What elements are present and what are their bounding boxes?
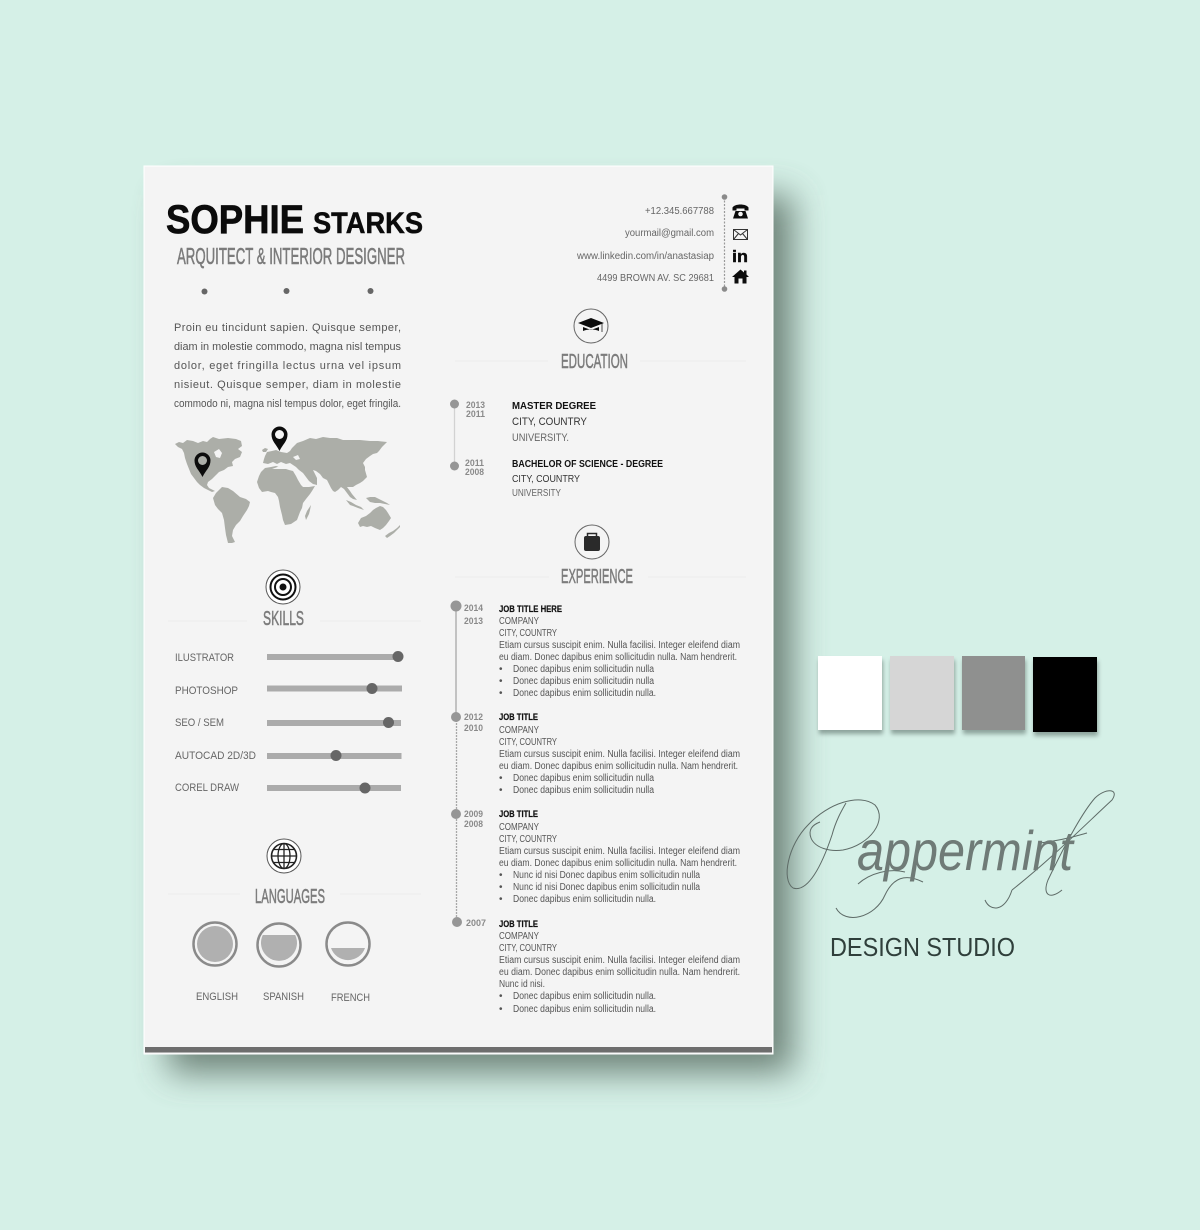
job 3: JOB TITLE <box>499 809 538 819</box>
icon: telephone <box>732 204 748 218</box>
job 3: • <box>499 870 503 881</box>
job 2: JOB TITLE <box>499 712 538 722</box>
header dots <box>202 288 374 294</box>
contact: linkedin: www.linkedin.com/in/anastasiap <box>576 251 714 262</box>
job 1: Donec dapibus enim sollicitudin nulla <box>513 676 654 687</box>
skill: autocad: AUTOCAD 2D/3D <box>175 750 256 762</box>
heading: skills: SKILLS <box>263 608 304 630</box>
job 1: 2014 <box>464 603 483 613</box>
education: bachelor: UNIVERSITY <box>512 488 561 499</box>
language: english: ENGLISH <box>196 991 238 1003</box>
intro text block: commodo ni, magna nisl tempus dolor, eget fringila. <box>174 398 401 410</box>
job 4: CITY, COUNTRY <box>499 943 557 954</box>
footer bar <box>145 1047 772 1052</box>
languages section <box>168 839 421 1004</box>
job 3: Etiam cursus suscipit enim. Nulla facilisi. Integer eleifend diam <box>499 846 740 857</box>
job 4: Etiam cursus suscipit enim. Nulla facilisi. Integer eleifend diam <box>499 955 740 966</box>
job 2: 2010 <box>464 723 483 733</box>
job 4: Donec dapibus enim sollicitudin nulla. <box>513 1004 656 1015</box>
job 2: • <box>499 773 503 784</box>
skill: illustrator <box>175 651 404 664</box>
job 2: COMPANY <box>499 725 539 736</box>
skill: photoshop <box>175 683 402 697</box>
job 1: • <box>499 664 503 675</box>
job 3: Donec dapibus enim sollicitudin nulla. <box>513 894 656 905</box>
job 1: Donec dapibus enim sollicitudin nulla. <box>513 688 656 699</box>
job 1 <box>464 603 740 699</box>
job 1: 2013 <box>464 616 483 626</box>
icon: map pin America <box>194 452 210 477</box>
skill: photoshop: PHOTOSHOP <box>175 685 238 697</box>
job 3: eu diam. Donec dapibus enim sollicitudin nulla. Nam hendrerit. <box>499 858 737 869</box>
job 2: CITY, COUNTRY <box>499 737 557 748</box>
education: master: 2011 <box>466 409 485 419</box>
job 3: • <box>499 894 503 905</box>
job 1: JOB TITLE HERE <box>499 604 562 614</box>
intro text block: nisieut. Quisque semper, diam in molestie <box>174 379 401 391</box>
skill: seo <box>175 717 401 729</box>
job 3: CITY, COUNTRY <box>499 834 557 845</box>
job 4 <box>466 918 740 1015</box>
title: name: SOPHIE <box>166 198 304 242</box>
job 2: • <box>499 785 503 796</box>
intro text block: diam in molestie commodo, magna nisl tempus <box>174 341 401 353</box>
job 1: Donec dapibus enim sollicitudin nulla <box>513 664 654 675</box>
icon: envelope <box>734 230 748 240</box>
intro text block: dolor, eget fringilla lectus urna vel ipsum <box>174 360 401 372</box>
heading: experience: EXPERIENCE <box>561 566 633 588</box>
contact: address: 4499 BROWN AV. SC 29681 <box>597 273 714 284</box>
job 4: eu diam. Donec dapibus enim sollicitudin nulla. Nam hendrerit. <box>499 967 740 978</box>
skill: illustrator: ILUSTRATOR <box>175 652 234 664</box>
skills section <box>168 570 421 794</box>
job 4: • <box>499 1004 503 1015</box>
job 4: • <box>499 991 503 1002</box>
icon: target <box>266 570 300 604</box>
logo: Pappermint: appermint <box>857 819 1075 882</box>
job 1: COMPANY <box>499 616 539 627</box>
contact: phone: +12.345.667788 <box>645 206 714 217</box>
education timeline <box>450 400 459 470</box>
language: french <box>326 922 370 1004</box>
map cut-outs <box>214 449 300 469</box>
language: english <box>194 922 238 1003</box>
job 2 <box>464 712 740 796</box>
icon: briefcase <box>575 525 609 559</box>
job 1: eu diam. Donec dapibus enim sollicitudin nulla. Nam hendrerit. <box>499 652 737 663</box>
experience section <box>450 525 746 1015</box>
education: master: 2013 <box>466 400 485 410</box>
education: master <box>466 400 596 444</box>
icon: globe <box>267 839 301 873</box>
job 4: Donec dapibus enim sollicitudin nulla. <box>513 991 656 1002</box>
job 3: • <box>499 882 503 893</box>
job 3: 2009 <box>464 809 483 819</box>
job 1: • <box>499 676 503 687</box>
job 3: 2008 <box>464 819 483 829</box>
logo: design studio: DESIGN STUDIO <box>830 932 1015 962</box>
skill: seo: SEO / SEM <box>175 717 224 729</box>
education: bachelor <box>465 458 663 499</box>
contact block <box>576 194 749 292</box>
job 2: Donec dapibus enim sollicitudin nulla <box>513 785 654 796</box>
intro text block: Proin eu tincidunt sapien. Quisque semper, <box>174 322 401 334</box>
education section <box>450 309 746 499</box>
contact: email: yourmail@gmail.com <box>625 228 714 239</box>
job 3: COMPANY <box>499 822 539 833</box>
education: bachelor: 2008 <box>465 467 484 477</box>
job 4: 2007 <box>466 918 486 928</box>
heading: education: EDUCATION <box>561 351 628 373</box>
world map <box>175 437 400 543</box>
job 4: JOB TITLE <box>499 919 538 929</box>
panel: resume page <box>144 166 773 1054</box>
job 1: • <box>499 688 503 699</box>
education: bachelor: CITY, COUNTRY <box>512 474 580 485</box>
job 2: eu diam. Donec dapibus enim sollicitudin nulla. Nam hendrerit. <box>499 761 738 772</box>
logo: Pappermint <box>787 791 1114 917</box>
title: name <box>166 198 423 242</box>
job 3 <box>464 809 740 905</box>
job 3: Nunc id nisi Donec dapibus enim sollicitudin nulla <box>513 882 700 893</box>
job 2: 2012 <box>464 712 483 722</box>
job 1: CITY, COUNTRY <box>499 628 557 639</box>
job 2: Donec dapibus enim sollicitudin nulla <box>513 773 654 784</box>
icon: house <box>732 270 749 284</box>
intro text block <box>174 322 401 410</box>
job 3: Nunc id nisi Donec dapibus enim sollicitudin nulla <box>513 870 700 881</box>
skill: corel draw: COREL DRAW <box>175 782 240 794</box>
skill: corel draw <box>175 782 401 794</box>
heading: languages: LANGUAGES <box>255 886 325 908</box>
title: name: STARKS <box>313 207 423 240</box>
colour swatches <box>818 656 1098 736</box>
language: spanish: SPANISH <box>263 991 304 1003</box>
job 1: Etiam cursus suscipit enim. Nulla facilisi. Integer eleifend diam <box>499 640 740 651</box>
icon: linkedin: in <box>732 247 748 266</box>
job 2: Etiam cursus suscipit enim. Nulla facilisi. Integer eleifend diam <box>499 749 740 760</box>
subtitle: ARQUITECT & INTERIOR DESIGNER <box>177 243 405 269</box>
job 4: COMPANY <box>499 931 539 942</box>
education: master: MASTER DEGREE <box>512 400 596 412</box>
icon: graduation cap <box>574 309 608 343</box>
education: bachelor: BACHELOR OF SCIENCE - DEGREE <box>512 459 663 470</box>
job 4: Nunc id nisi. <box>499 979 545 990</box>
language: spanish <box>258 924 304 1003</box>
language: french: FRENCH <box>331 992 370 1004</box>
experience timeline <box>450 600 462 927</box>
icon: map pin Europe <box>272 426 288 451</box>
skill: autocad <box>175 750 402 762</box>
page shadow <box>168 195 793 1073</box>
education: master: UNIVERSITY. <box>512 432 569 444</box>
education: master: CITY, COUNTRY <box>512 416 588 428</box>
education: bachelor: 2011 <box>465 458 484 468</box>
